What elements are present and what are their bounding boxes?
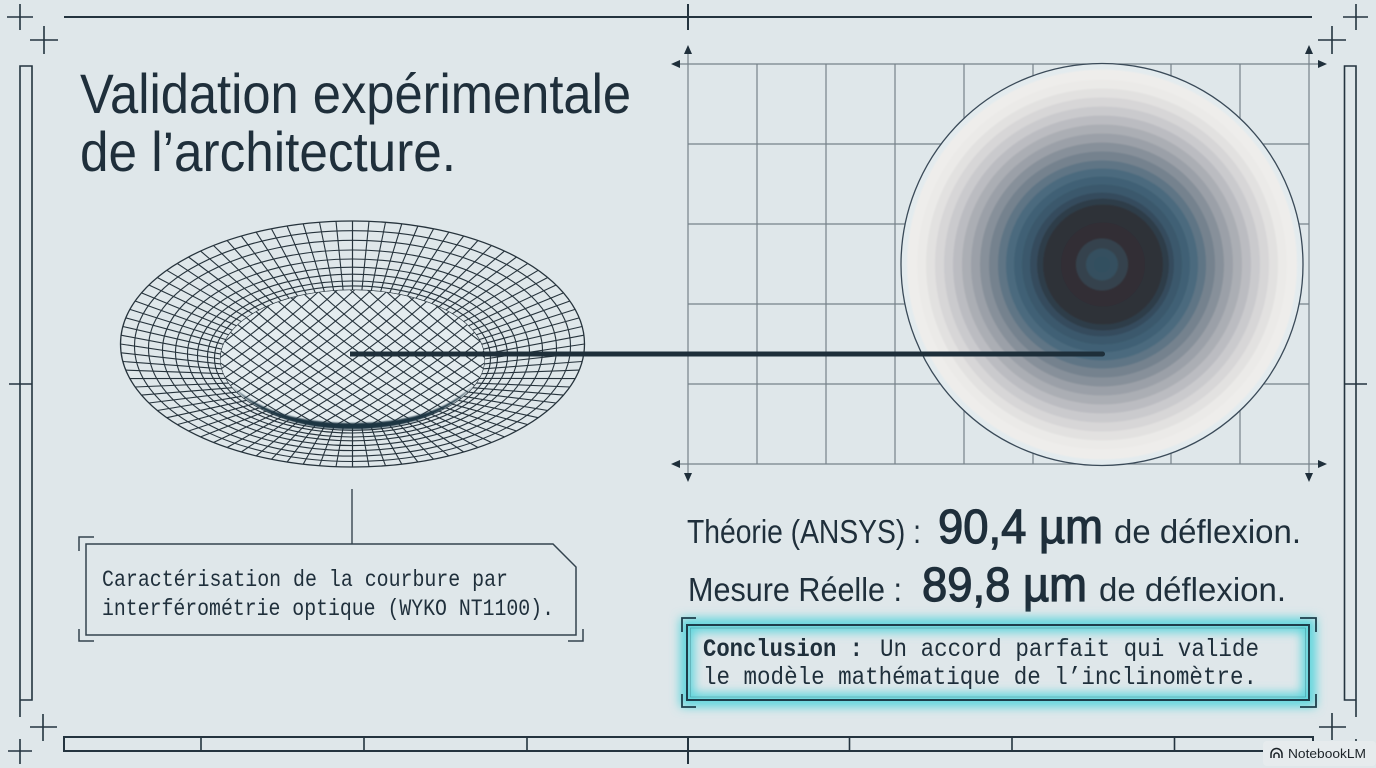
badge label: NotebookLM [1288, 746, 1366, 761]
theory result: Théorie (ANSYS) : [687, 513, 921, 550]
badge background [1263, 741, 1376, 766]
icon: NotebookLM arcs [1271, 748, 1282, 758]
caption text: Caractérisation de la courbure par [102, 567, 508, 593]
caption text [102, 567, 554, 622]
callout glow [687, 625, 1309, 700]
3D deformed membrane mesh [120, 220, 586, 468]
conclusion callout [682, 618, 1316, 707]
theory result: de déflexion. [1114, 513, 1301, 550]
callout text [703, 635, 1259, 692]
NotebookLM badge [1263, 741, 1376, 766]
callout text: Un accord parfait qui valide [880, 635, 1259, 664]
measured result [688, 559, 1286, 612]
measured result: 89,8 µm [922, 559, 1087, 612]
leader line to caption [351, 489, 353, 544]
title: Validation expérimentale [80, 62, 631, 125]
title: de l’architecture. [80, 120, 456, 183]
caption box [79, 537, 583, 641]
theory result [687, 501, 1301, 554]
mesh: dark lower rim [232, 386, 473, 429]
mesh: bowl lattice [220, 290, 484, 424]
callout corner brackets [682, 618, 1316, 707]
callout text: Conclusion : [703, 635, 863, 664]
connector between mesh and disc [350, 352, 1105, 356]
mesh: radial spokes [120, 221, 584, 467]
mesh: concentric rings [120, 221, 584, 467]
caption corner brackets [79, 537, 583, 641]
caption outline [86, 544, 576, 635]
measured result: de déflexion. [1099, 571, 1286, 608]
measurement grid [678, 52, 1320, 476]
interferometry fringe disc [901, 64, 1303, 466]
callout outline [687, 625, 1309, 700]
measured result: Mesure Réelle : [688, 571, 902, 608]
title [80, 62, 631, 183]
grid axis arrows [671, 45, 1327, 482]
theory result: 90,4 µm [938, 501, 1103, 554]
callout text: le modèle mathématique de l’inclinomètre. [703, 663, 1257, 692]
caption text: interférométrie optique (WYKO NT1100). [102, 596, 554, 622]
